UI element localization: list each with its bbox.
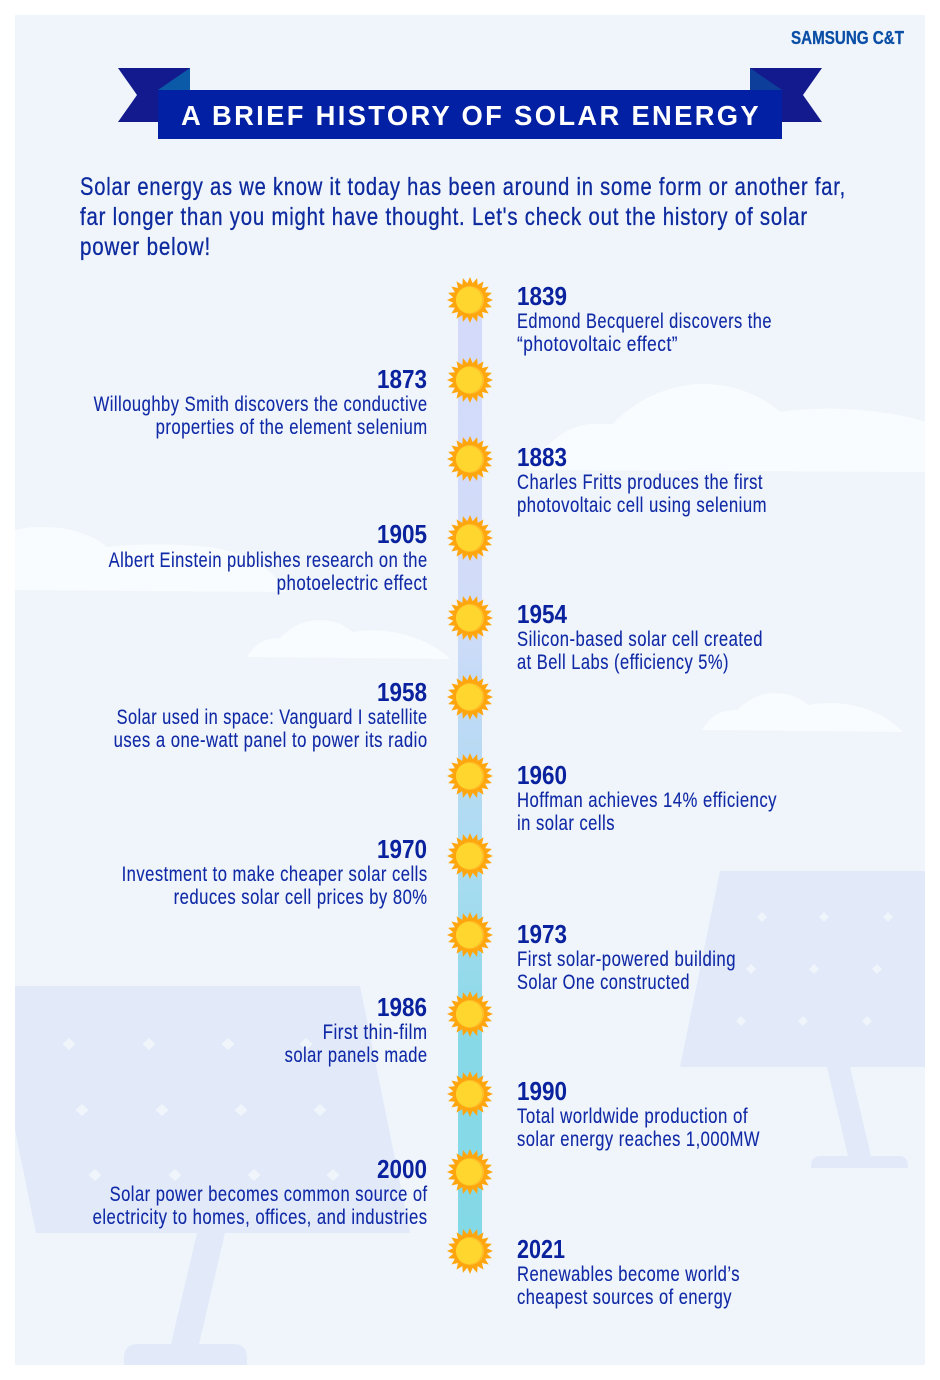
event: 1960 bbox=[517, 760, 777, 835]
event: 1883: 1883 bbox=[517, 442, 567, 472]
event: 1954 bbox=[517, 599, 763, 674]
event: 1954: Silicon-based solar cell created bbox=[517, 628, 763, 651]
event: 2000 bbox=[93, 1154, 428, 1229]
event: 1970: reduces solar cell prices by 80% bbox=[174, 886, 428, 909]
event: 1986: 1986 bbox=[377, 992, 427, 1022]
event: 1986: solar panels made bbox=[285, 1044, 428, 1067]
event: 1986: First thin-film bbox=[323, 1021, 428, 1044]
event: 1954: 1954 bbox=[517, 599, 567, 629]
event: 1990: 1990 bbox=[517, 1076, 567, 1106]
cloud: centre bbox=[247, 620, 450, 659]
event: 1973 bbox=[517, 919, 736, 994]
logo: Samsung C&T: SAMSUNG C&T bbox=[791, 28, 904, 48]
event: 1905: Albert Einstein publishes research on the bbox=[109, 549, 428, 572]
event: 1905: photoelectric effect bbox=[277, 572, 428, 595]
timeline bar bbox=[458, 300, 482, 1251]
event: 2021 bbox=[517, 1234, 740, 1309]
event: 2021: 2021 bbox=[517, 1234, 565, 1264]
event: 1970 bbox=[122, 834, 428, 909]
event: 2000: 2000 bbox=[377, 1154, 427, 1184]
cloud: upper right bbox=[526, 384, 925, 472]
title banner: A BRIEF HISTORY OF SOLAR ENERGY bbox=[181, 100, 761, 131]
event: 1960: in solar cells bbox=[517, 812, 615, 835]
event: 1905 bbox=[109, 519, 428, 595]
event: 1839: 1839 bbox=[517, 281, 567, 311]
event: 1958: 1958 bbox=[377, 677, 427, 707]
event: 2021: Renewables become world’s bbox=[517, 1263, 740, 1286]
cloud: right bbox=[702, 693, 903, 732]
event: 1970: 1970 bbox=[377, 834, 427, 864]
event: 1958: uses a one-watt panel to power its radio bbox=[114, 729, 428, 752]
title banner bbox=[118, 68, 822, 139]
event: 1883: photovoltaic cell using selenium bbox=[517, 494, 767, 517]
event: 1958: Solar used in space: Vanguard I satellite bbox=[117, 706, 428, 729]
event: 1873: 1873 bbox=[377, 364, 427, 394]
event: 2000: Solar power becomes common source of bbox=[110, 1183, 428, 1206]
event: 1970: Investment to make cheaper solar cells bbox=[122, 863, 428, 886]
event: 1883 bbox=[517, 442, 767, 517]
event: 1873 bbox=[94, 364, 428, 439]
event: 1973: Solar One constructed bbox=[517, 971, 690, 994]
event: 1954: at Bell Labs (efficiency 5%) bbox=[517, 651, 729, 674]
event: 1960: Hoffman achieves 14% efficiency bbox=[517, 789, 777, 812]
event: 1873: properties of the element selenium bbox=[156, 416, 428, 439]
event: 1960: 1960 bbox=[517, 760, 567, 790]
event: 1873: Willoughby Smith discovers the conductive bbox=[94, 393, 428, 416]
event: 1990 bbox=[517, 1076, 760, 1151]
event: 1990: solar energy reaches 1,000MW bbox=[517, 1128, 760, 1151]
event: 2000: electricity to homes, offices, and industries bbox=[93, 1206, 428, 1229]
event: 1973: First solar-powered building bbox=[517, 948, 736, 971]
intro text bbox=[80, 173, 846, 261]
timeline suns bbox=[447, 277, 493, 1274]
event: 1839: “photovoltaic effect” bbox=[517, 333, 678, 356]
solar panel: left bbox=[15, 986, 410, 1365]
intro text: power below! bbox=[80, 233, 211, 261]
event: 2021: cheapest sources of energy bbox=[517, 1286, 732, 1309]
event: 1986 bbox=[285, 992, 428, 1067]
event: 1958 bbox=[114, 677, 428, 752]
event: 1883: Charles Fritts produces the first bbox=[517, 471, 763, 494]
event: 1905: 1905 bbox=[377, 519, 427, 549]
event: 1839 bbox=[517, 281, 772, 356]
solar panel: right bbox=[680, 871, 925, 1168]
cloud: left bbox=[15, 527, 287, 592]
event: 1839: Edmond Becquerel discovers the bbox=[517, 310, 772, 333]
event: 1990: Total worldwide production of bbox=[517, 1105, 748, 1128]
event: 1973: 1973 bbox=[517, 919, 567, 949]
